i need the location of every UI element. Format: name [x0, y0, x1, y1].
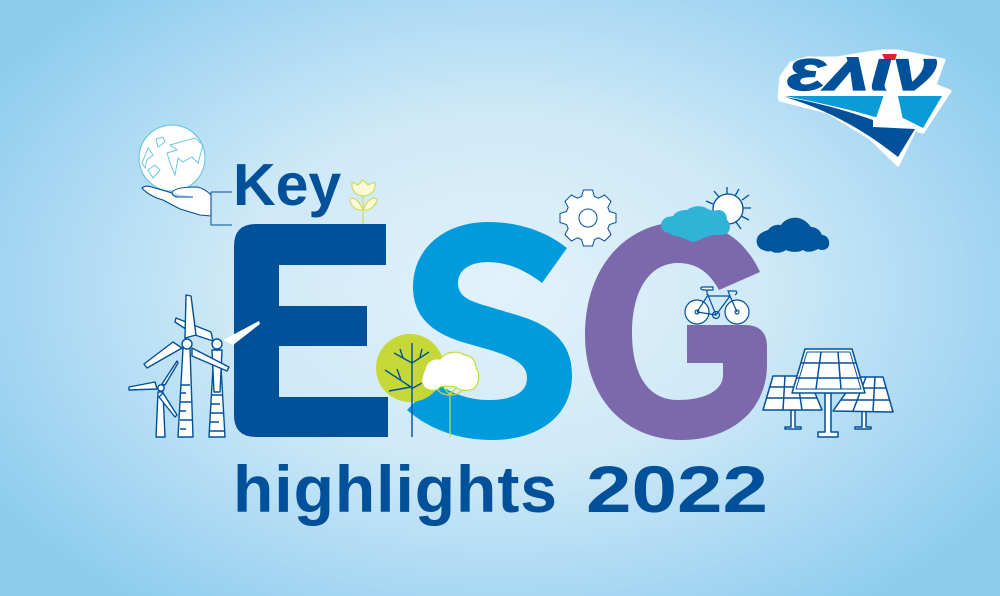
icon: gear	[560, 190, 616, 246]
logo: ELIN: ελιν	[787, 38, 937, 103]
heading: highlights 2022: highlights	[233, 452, 557, 526]
solar panel right	[833, 377, 893, 429]
logo: ELIN	[779, 38, 950, 165]
turbine back	[175, 318, 225, 437]
heading: highlights 2022	[233, 452, 768, 526]
letter E	[234, 224, 388, 437]
letter S	[407, 222, 572, 440]
letter G	[585, 222, 767, 440]
icon: white cloud tree	[422, 352, 479, 437]
icon: hand	[142, 186, 211, 216]
heading: highlights 2022: 2022	[586, 452, 768, 526]
icon: globe in hand	[139, 125, 232, 225]
turbine small	[129, 361, 178, 437]
icon: bicycle	[685, 287, 749, 324]
icon: solar panels	[763, 349, 893, 437]
solar panel centre	[792, 349, 865, 437]
turbine blade over letter E	[223, 321, 260, 345]
icon: navy cloud	[757, 218, 829, 253]
icon: flower	[350, 180, 377, 224]
icon: teal cloud	[661, 206, 730, 242]
heading: Key: Key	[233, 152, 341, 218]
icon: green tree	[376, 334, 444, 437]
icon: wind turbines	[129, 295, 229, 437]
turbine front	[144, 295, 229, 437]
solar panel left	[763, 376, 822, 429]
icon: sun	[706, 187, 751, 229]
icon: globe	[139, 125, 205, 191]
